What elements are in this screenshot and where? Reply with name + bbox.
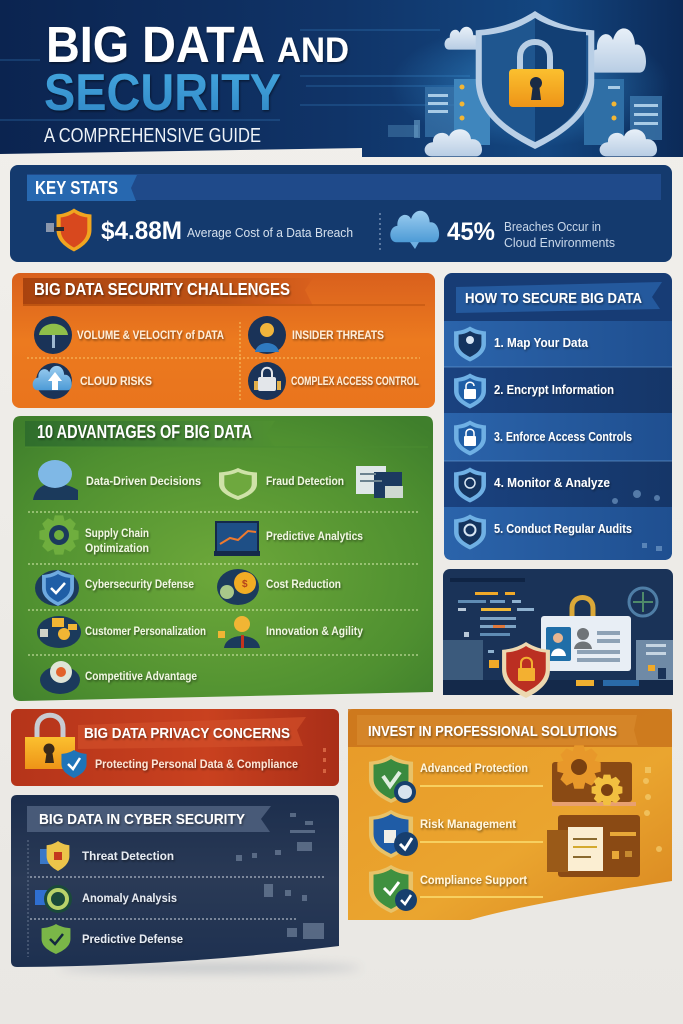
item: supply chain optimization: [39, 515, 149, 555]
code lines: [450, 578, 534, 668]
item: cloud risks: [33, 363, 152, 399]
item: supply chain optimization: Supply Chain: [85, 528, 149, 540]
red shield: [502, 642, 550, 698]
item: threat detection: [40, 841, 174, 871]
item: competitive advantage: Competitive Advantage: [85, 671, 197, 683]
item: cybersecurity defense: [35, 570, 194, 606]
title: BIG DATA: [46, 16, 265, 73]
item: compliance support: Compliance Support: [420, 873, 527, 887]
key stats heading: [27, 175, 137, 201]
item: predictive defense: [42, 924, 183, 954]
item: volume and velocity: VOLUME & VELOCITY of DATA: [77, 330, 224, 342]
title: [44, 16, 349, 122]
illustration: gears: [552, 745, 636, 806]
illustration: id badge and security: [443, 569, 673, 698]
step 2: [454, 374, 614, 408]
item: cost reduction: Cost Reduction: [266, 579, 341, 591]
header banner: [0, 0, 683, 157]
panel: key stats: [10, 165, 672, 262]
step 3: [454, 420, 632, 456]
stat: cloud breaches: 45%: [447, 218, 495, 246]
item: predictive analytics: Predictive Analytics: [266, 531, 363, 543]
item: customer personalization: [37, 616, 206, 648]
panel: big data privacy concerns: [11, 709, 339, 786]
icon: cloud: [390, 211, 439, 249]
shield with padlock: [476, 11, 594, 149]
soft shadow under lower panels: [60, 963, 360, 973]
panel: how to secure big data: [444, 273, 672, 560]
step 4: [454, 468, 610, 502]
item: supply chain optimization: Optimization: [85, 543, 149, 555]
panel: invest in professional solutions: [348, 709, 672, 920]
title: SECURITY: [44, 64, 281, 122]
item: complex access control: COMPLEX ACCESS CONTROL: [291, 376, 419, 388]
subtitle: Protecting Personal Data & Compliance: [95, 757, 298, 771]
illustration: document: [547, 815, 640, 877]
item: compliance support: [369, 865, 527, 913]
item: insider threats: INSIDER THREATS: [292, 330, 384, 342]
step 1: 1. Map Your Data: [494, 335, 589, 350]
item: fraud detection: [219, 466, 403, 500]
server racks: [388, 79, 662, 145]
item: insider threats: [248, 316, 384, 354]
item: predictive analytics: [214, 522, 363, 556]
item: threat detection: Threat Detection: [82, 849, 174, 863]
item: cost reduction: [217, 569, 341, 605]
stat: breach cost: $4.88M: [101, 217, 182, 245]
subtitle: A COMPREHENSIVE GUIDE: [44, 125, 261, 147]
heading: HOW TO SECURE BIG DATA: [465, 290, 642, 307]
clouds: [425, 27, 657, 156]
heading: [456, 282, 662, 313]
item: predictive defense: Predictive Defense: [82, 932, 183, 946]
item: cybersecurity defense: Cybersecurity Defense: [85, 579, 194, 591]
panel: big data in cyber security: [11, 795, 339, 967]
step 1: [454, 326, 589, 362]
heading: INVEST IN PROFESSIONAL SOLUTIONS: [368, 723, 617, 740]
step 3: 3. Enforce Access Controls: [494, 429, 632, 444]
stat: cloud breaches: [447, 218, 615, 250]
item: anomaly analysis: Anomaly Analysis: [82, 891, 177, 905]
heading: BIG DATA SECURITY CHALLENGES: [34, 279, 290, 299]
step 5: [454, 514, 632, 550]
item: advanced protection: Advanced Protection: [420, 761, 528, 775]
title: AND: [277, 31, 349, 70]
id card: [541, 616, 631, 671]
item: cost reduction: $: [242, 579, 248, 590]
panel: big data security challenges: [12, 273, 435, 408]
heading: BIG DATA IN CYBER SECURITY: [39, 811, 245, 828]
item: volume and velocity: [34, 316, 224, 354]
icon: padlock with check shield: [25, 715, 87, 778]
item: customer personalization: Customer Personalization: [85, 626, 206, 638]
item: data-driven decisions: Data-Driven Decisions: [86, 476, 201, 488]
heading: 10 ADVANTAGES OF BIG DATA: [37, 422, 252, 442]
item: advanced protection: [369, 755, 528, 803]
item: innovation and agility: [218, 616, 364, 648]
stat: cloud breaches: Cloud Environments: [504, 236, 615, 250]
item: innovation and agility: Innovation & Agility: [266, 626, 364, 638]
item: risk management: [369, 810, 516, 858]
heading: BIG DATA PRIVACY CONCERNS: [84, 725, 290, 742]
step 5: 5. Conduct Regular Audits: [494, 521, 632, 536]
stat: breach cost: Average Cost of a Data Breach: [187, 225, 353, 240]
heading: [27, 806, 271, 832]
stat: cloud breaches: Breaches Occur in: [504, 220, 601, 234]
item: risk management: Risk Management: [420, 817, 516, 831]
item: data-driven decisions: [33, 460, 201, 500]
item: competitive advantage: [40, 661, 197, 694]
step 4: 4. Monitor & Analyze: [494, 475, 610, 490]
icon: orange shield: [46, 208, 91, 252]
panel: 10 advantages of big data: [13, 416, 433, 701]
item: cloud risks: CLOUD RISKS: [80, 376, 152, 388]
key stats heading: KEY STATS: [35, 178, 118, 198]
item: fraud detection: Fraud Detection: [266, 476, 344, 488]
item: anomaly analysis: [35, 885, 177, 913]
step 2: 2. Encrypt Information: [494, 382, 614, 397]
stat: breach cost: [101, 217, 353, 245]
item: complex access control: [248, 362, 419, 400]
